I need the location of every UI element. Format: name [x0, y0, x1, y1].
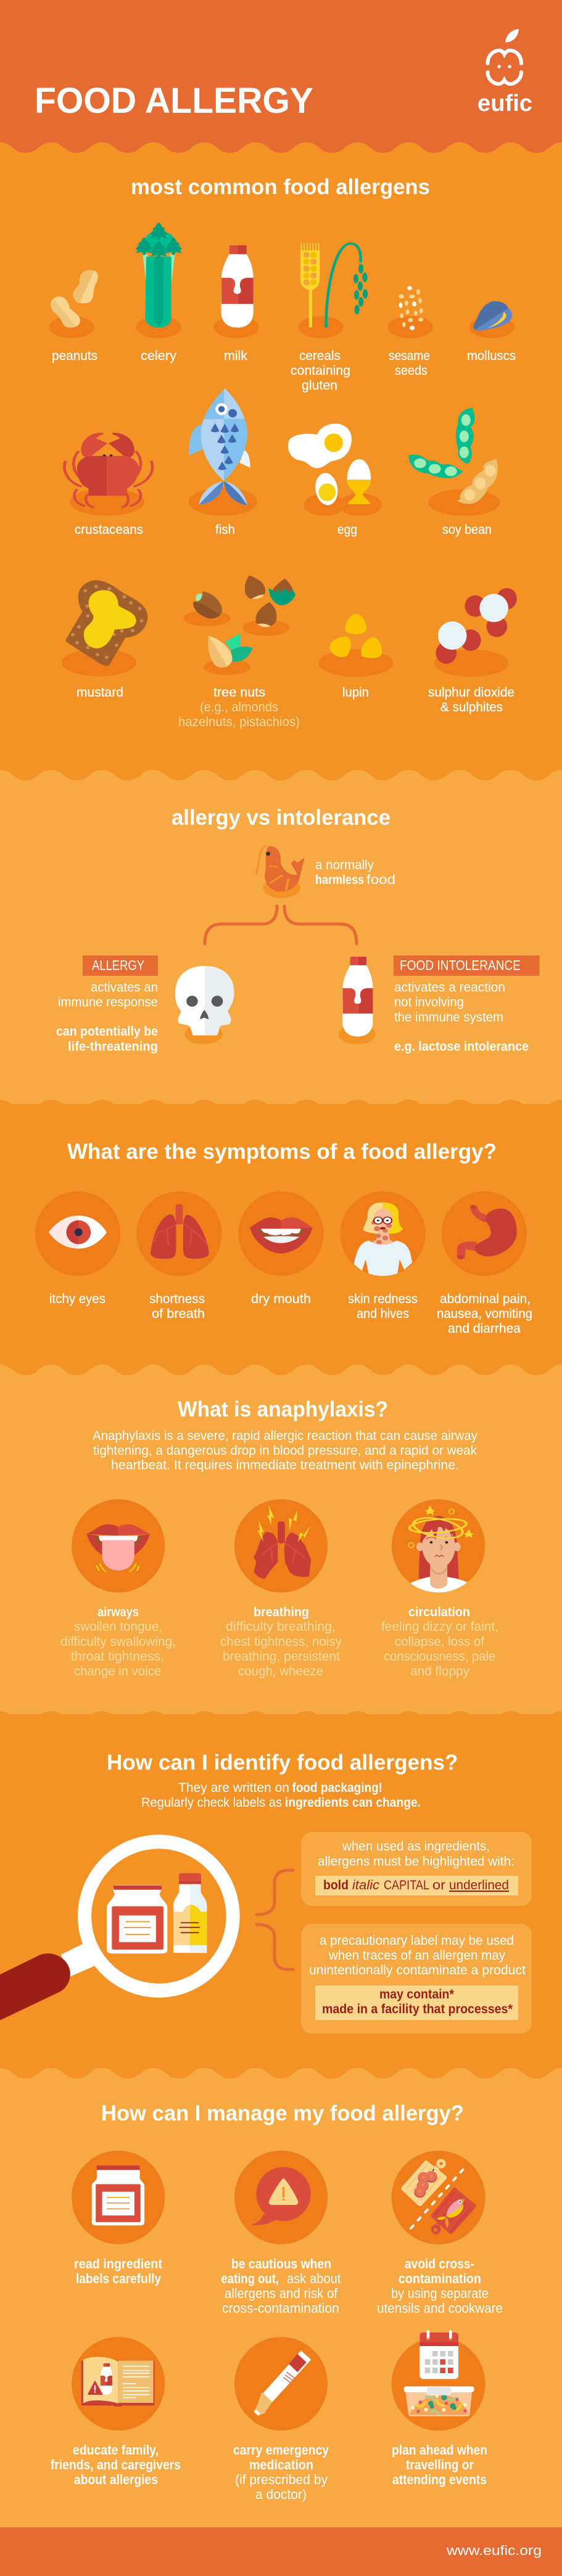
panel: manage food allergy: [51, 2101, 503, 2502]
label: peanuts: [52, 349, 97, 363]
label: carry emergency: [233, 2442, 329, 2458]
label: skin redness: [348, 1292, 418, 1306]
item: shortness of breath: [136, 1192, 222, 1321]
label: fish: [215, 523, 235, 537]
icon: shrimp: [256, 846, 305, 898]
label: travelling or: [406, 2457, 474, 2472]
intolerance column: [339, 955, 540, 1054]
label: soy bean: [442, 523, 492, 537]
label: throat tightness,: [71, 1650, 164, 1664]
label: [437, 1292, 532, 1336]
text: intolerance description: e.g. lactose intolerance: [394, 1040, 529, 1054]
callout: may contain: [315, 1985, 518, 2020]
item: milk: [213, 245, 258, 363]
label: attending events: [392, 2472, 487, 2487]
text: allergy description: immune response: [58, 995, 158, 1010]
icon: red eye: [35, 1192, 120, 1276]
logo: eufic apple: [477, 29, 532, 117]
item: fish: [189, 388, 257, 537]
icon: celery: [136, 222, 182, 338]
label: [381, 1605, 498, 1678]
icon: jar: [72, 2151, 165, 2244]
heading: How can I identify food allergens?: [107, 1751, 458, 1775]
label: and hives: [357, 1307, 409, 1321]
label: sulphur dioxide: [428, 685, 514, 700]
text: subheading: ingredients can change.: [285, 1796, 421, 1810]
label: milk: [224, 349, 248, 363]
label: tree nuts: [213, 685, 265, 700]
icon: stomach: [442, 1192, 527, 1276]
text: intolerance description: [394, 981, 529, 1054]
label: seeds: [395, 364, 428, 378]
icon: lungs: [136, 1192, 222, 1276]
brace: ingredients: [257, 1870, 293, 1915]
text: harmless food: harmless: [315, 873, 364, 887]
item: lupin: [319, 614, 393, 700]
label: molluscs: [467, 349, 516, 363]
text: subheading: Regularly check labels as: [141, 1796, 282, 1810]
label: ask about: [287, 2271, 341, 2286]
heading: allergy vs intolerance: [171, 806, 391, 830]
icon: crab: [64, 433, 152, 516]
allergy column: [56, 955, 234, 1054]
label: lupin: [342, 685, 369, 700]
label: breathing: [254, 1605, 309, 1619]
label: of breath: [152, 1307, 205, 1321]
panel: most common food allergens: [49, 175, 517, 729]
label: [389, 349, 430, 378]
label: & sulphites: [440, 700, 503, 714]
label: crustaceans: [75, 523, 143, 537]
icon: wheat and oat: [298, 243, 368, 338]
text: allergy description: activates an: [91, 981, 158, 995]
label: [392, 2442, 487, 2487]
label: (e.g., almonds: [200, 700, 278, 714]
text: allergy description: can potentially be: [56, 1024, 158, 1039]
text: allergy description: life-threatening: [68, 1040, 158, 1054]
label: by using separate: [391, 2286, 489, 2301]
text: allergy description: [56, 981, 158, 1054]
label: avoid cross-: [405, 2256, 474, 2271]
item: egg: [288, 423, 382, 537]
callout: may contain: may contain*: [379, 1987, 455, 2002]
callout: highlight styles: bold: [323, 1878, 349, 1892]
panel: highlighted ingredients: [301, 1832, 532, 1906]
item: sulphur dioxide: [428, 588, 517, 714]
label: shortness: [149, 1292, 205, 1306]
label: hazelnuts, pistachios): [178, 715, 300, 729]
label: cough, wheeze: [238, 1664, 323, 1678]
label: breathing, persistent: [223, 1650, 340, 1664]
text: harmless food: [315, 858, 395, 887]
text: subheading: food packaging!: [292, 1781, 382, 1795]
label: eating out,: [221, 2271, 279, 2286]
item: molluscs: [467, 301, 516, 363]
item: celery: [136, 222, 182, 363]
callout: may contain: made in a facility that processes*: [322, 2002, 513, 2016]
icon: warning speech bubble: [234, 2151, 328, 2244]
label: labels carefully: [76, 2271, 161, 2286]
panel: precautionary label: [301, 1924, 532, 2034]
icon: sesame seeds: [388, 286, 433, 338]
text: definition: [93, 1429, 477, 1473]
text: subheading: They are written on: [178, 1781, 289, 1795]
icon: mussel: [469, 301, 514, 338]
panel: allergy vs intolerance: [56, 806, 540, 1054]
label: airways: [97, 1605, 139, 1619]
icon: skull: [175, 966, 234, 1044]
arrow: split bracket: [205, 906, 357, 944]
icon: lupin beans: [319, 614, 393, 677]
label: [428, 685, 514, 714]
logo: eufic apple: eufic: [477, 91, 532, 117]
label: [220, 1605, 342, 1678]
icon: open book: [72, 2337, 165, 2431]
icon: dizzy woman: [392, 1499, 485, 1595]
label: [60, 1605, 176, 1678]
item: read labels: [72, 2151, 165, 2286]
text: subheading: [141, 1781, 421, 1810]
label: a doctor): [255, 2487, 307, 2502]
icon: swollen tongue: [72, 1499, 165, 1593]
label: chest tightness, noisy: [220, 1635, 342, 1649]
label: read ingredient: [74, 2256, 162, 2271]
tag: allergy: [83, 955, 158, 976]
label: mustard: [76, 685, 123, 700]
item: eating out: [221, 2151, 341, 2316]
item: cereals: [291, 243, 368, 393]
text: intolerance description: the immune system: [394, 1010, 503, 1024]
panel: highlighted ingredients: allergens must be highlighted with:: [318, 1854, 514, 1868]
label: nausea, vomiting: [437, 1307, 532, 1321]
brace: precautionary: [257, 1924, 293, 1969]
label: and floppy: [410, 1664, 469, 1678]
label: contamination: [399, 2271, 481, 2286]
label: educate family,: [73, 2442, 159, 2458]
callout: highlight styles: or: [432, 1878, 445, 1892]
label: celery: [141, 349, 177, 363]
item: sesame: [388, 286, 433, 378]
icon: woman with hives: [340, 1192, 426, 1277]
panel: precautionary label: unintentionally contaminate a product: [309, 1963, 526, 1977]
label: allergens and risk of: [225, 2286, 338, 2301]
item: cross-contamination: [377, 2151, 503, 2316]
item: peanuts: [49, 270, 98, 363]
icon: milk bottle: [339, 957, 376, 1044]
icon: molecules: [434, 588, 517, 677]
icon: soy pods: [408, 408, 500, 516]
label: [377, 2256, 503, 2316]
callout: highlight styles: underlined: [449, 1878, 509, 1892]
panel: symptoms: [35, 1140, 532, 1336]
panel: highlighted ingredients: when used as ingredients,: [342, 1839, 490, 1854]
label: plan ahead when: [392, 2442, 487, 2458]
label: abdominal pain,: [440, 1292, 531, 1306]
footer url: www.eufic.org: [446, 2543, 542, 2558]
label: (if prescribed by: [235, 2472, 328, 2487]
label: dry mouth: [251, 1292, 311, 1306]
label: [149, 1292, 205, 1321]
heading: What are the symptoms of a food allergy?: [67, 1140, 497, 1164]
label: [178, 685, 300, 729]
callout: highlight styles: [315, 1876, 518, 1895]
heading: How can I manage my food allergy?: [101, 2101, 464, 2125]
label: circulation: [408, 1605, 470, 1619]
icon: mouth: [238, 1192, 324, 1276]
label: difficulty breathing,: [226, 1620, 336, 1634]
label: collapse, loss of: [395, 1635, 484, 1649]
item: circulation: [381, 1499, 498, 1678]
panel: precautionary label: when traces of an allergen may: [328, 1948, 505, 1963]
item: itchy eyes: [35, 1192, 120, 1306]
icon: auto-injector: [234, 2337, 328, 2431]
item: tree nuts: [178, 575, 300, 729]
item: soy bean: [408, 408, 500, 537]
title: FOOD ALLERGY: [35, 81, 313, 121]
item: abdominal pain: [437, 1192, 532, 1336]
text: harmless food: food: [366, 873, 395, 887]
label: cross-contamination: [222, 2300, 339, 2316]
item: educate: [51, 2337, 181, 2487]
text: intolerance description: activates a reaction: [394, 981, 505, 995]
label: be cautious when: [231, 2256, 331, 2271]
label: [291, 349, 350, 393]
heading: What is anaphylaxis?: [178, 1397, 388, 1421]
label: difficulty swallowing,: [60, 1635, 176, 1649]
icon: eggs: [288, 423, 382, 516]
label: sesame: [389, 349, 430, 363]
icon: fish: [189, 388, 257, 516]
label: friends, and caregivers: [51, 2457, 181, 2472]
item: breathing: [220, 1499, 342, 1678]
panel: anaphylaxis: [60, 1397, 498, 1678]
label: utensils and cookware: [377, 2300, 503, 2316]
text: definition: Anaphylaxis is a severe, rapid allergic reaction that can cause airway: [93, 1429, 477, 1443]
callout: highlight styles: CAPITAL: [384, 1878, 429, 1892]
icon: peanuts: [49, 270, 98, 338]
label: [74, 2256, 162, 2286]
icon: milk bottle: [213, 245, 258, 338]
label: medication: [249, 2457, 313, 2472]
label: change in voice: [74, 1664, 161, 1678]
label: itchy eyes: [49, 1292, 105, 1306]
label: gluten: [302, 378, 337, 393]
illustration: magnifier with jar and bottle: [0, 1834, 240, 2020]
callout: highlight styles: italic: [352, 1878, 380, 1892]
label: swollen tongue,: [74, 1620, 162, 1634]
item: emergency medication: [233, 2337, 329, 2502]
label: [348, 1292, 418, 1321]
panel: header: [35, 29, 532, 121]
label: cereals: [299, 349, 341, 363]
item: dry mouth: [238, 1192, 324, 1306]
text: harmless food: a normally: [315, 858, 374, 872]
label: containing: [291, 364, 350, 378]
text: intolerance description: not involving: [394, 995, 464, 1010]
item: skin redness: [340, 1192, 426, 1321]
label: and diarrhea: [448, 1322, 521, 1336]
item: mustard: [62, 580, 147, 700]
icon: cutting boards: [392, 2151, 486, 2244]
tag: allergy: ALLERGY: [92, 958, 144, 973]
label: feeling dizzy or faint,: [381, 1620, 498, 1634]
heading: most common food allergens: [131, 175, 430, 199]
icon: inflamed lungs: [234, 1499, 328, 1593]
icon: mustard toast: [62, 580, 147, 676]
text: definition: tightening, a dangerous drop in blood pressure, and a rapid or weak: [93, 1444, 477, 1458]
label: [221, 2256, 341, 2316]
panel: precautionary label: a precautionary label may be used: [320, 1934, 514, 1948]
item: airways: [60, 1499, 176, 1678]
tag: food intolerance: FOOD INTOLERANCE: [400, 958, 521, 973]
label: egg: [337, 523, 357, 537]
item: crustaceans: [64, 433, 152, 537]
panel: identify allergens: [0, 1751, 532, 2034]
icon: calendar and lunch box: [392, 2330, 486, 2431]
label: [51, 2442, 181, 2487]
icon: tree nuts: [183, 575, 295, 675]
text: definition: heartbeat. It requires immediate treatment with epinephrine.: [111, 1458, 459, 1473]
label: consciousness, pale: [384, 1650, 495, 1664]
item: plan ahead: [392, 2330, 487, 2487]
label: [233, 2442, 329, 2502]
label: about allergies: [74, 2472, 158, 2487]
